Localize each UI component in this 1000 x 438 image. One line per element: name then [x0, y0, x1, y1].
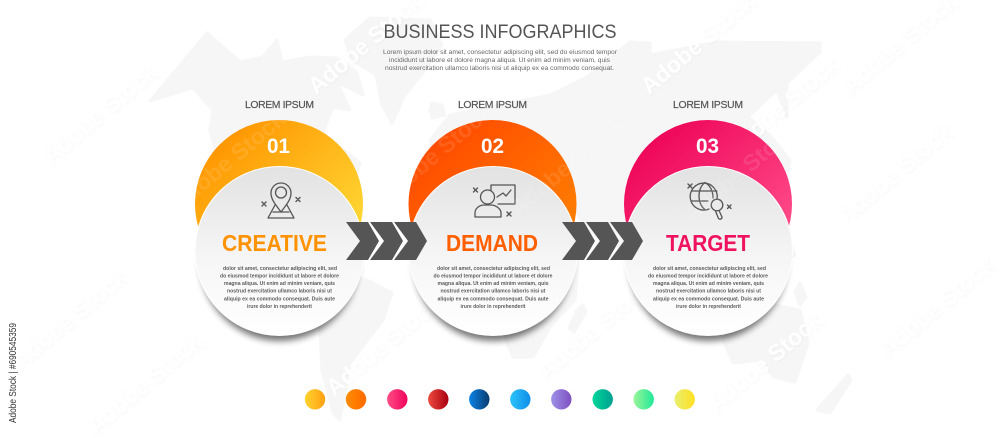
watermark pattern: Adobe Stock	[321, 291, 445, 401]
watermark pattern: Adobe Stock	[720, 52, 844, 162]
panel: creative	[195, 100, 364, 341]
body text 2: nostrud exercitation ullamco laboris nisi ut	[440, 289, 546, 295]
body text 2: irure dolor in reprehenderit	[460, 304, 526, 310]
body text 1: nostrud exercitation ullamco laboris nisi ut	[227, 289, 332, 295]
icon: map pin	[262, 183, 300, 218]
number 03: 03	[696, 135, 719, 158]
watermarks over circles: Adobe Stock	[678, 117, 802, 227]
heading: lorem ipsum 1: LOREM IPSUM	[245, 100, 314, 111]
body text 3: dolor sit amet, consectetur adipiscing elit, sed	[653, 266, 767, 272]
body text 2: dolor sit amet, consectetur adipiscing elit, sed	[437, 266, 551, 272]
intro text	[383, 49, 618, 72]
body text 1	[220, 266, 339, 310]
body text 3: irure dolor in reprehenderit	[676, 304, 741, 310]
body text 1: dolor sit amet, consectetur adipiscing elit, sed	[223, 266, 338, 272]
body text 2	[434, 266, 552, 310]
watermarks over circles	[166, 99, 802, 227]
circle shadow 3	[629, 183, 787, 341]
body text 3: aliquip ex ea commodo consequat. Duis aute	[653, 296, 764, 302]
watermarks over circles: Adobe Stock	[166, 106, 290, 216]
body text 3: magna aliqua. Ut enim ad minim veniam, quis	[653, 281, 764, 287]
heading: lorem ipsum 3: LOREM IPSUM	[673, 100, 743, 111]
body text 2: do eiusmod tempor incididunt ut labore et dolore	[434, 274, 552, 280]
title: BUSINESS INFOGRAPHICS	[384, 22, 616, 43]
intro text: Lorem ipsum dolor sit amet, consectetur adipiscing elit, sed do eiusmod tempor	[383, 49, 618, 56]
side credit: Adobe Stock | #690545359	[8, 323, 19, 423]
white circle 3	[624, 166, 792, 336]
world map background	[150, 18, 851, 420]
arrow: chevrons 1 to 2	[346, 222, 427, 260]
arrow: chevrons 2 to 3	[562, 222, 643, 260]
colored circle 1	[195, 120, 363, 288]
body text 1: magna aliqua. Ut enim ad minim veniam, quis	[224, 281, 335, 287]
body text 2: magna aliqua. Ut enim ad minim veniam, quis	[438, 281, 548, 287]
number 02: 02	[481, 135, 504, 158]
panel: demand	[408, 100, 578, 341]
intro text: incididunt ut labore et dolore magna aliqua. Ut enim ad minim veniam, quis	[389, 57, 611, 64]
circle shadow 2	[414, 183, 572, 341]
white circle 1	[195, 166, 364, 336]
body text 3: nostrud exercitation ullamco laboris nisi ut	[656, 289, 761, 295]
circle shadow 1	[200, 183, 358, 341]
label: target: TARGET	[666, 230, 750, 256]
watermark pattern: Adobe Stock	[703, 307, 827, 417]
label: demand: DEMAND	[446, 230, 538, 256]
watermark pattern: Adobe Stock	[533, 274, 657, 384]
panel: target	[624, 100, 792, 341]
body text 1: aliquip ex ea commodo consequat. Duis aute	[224, 296, 335, 302]
intro text: nostrud exercitation ullamco laboris nisi ut aliquip ex ea commodo consequat.	[385, 65, 614, 72]
body text 1: irure dolor in reprehenderit	[247, 304, 312, 310]
watermark pattern: Adobe Stock	[875, 252, 999, 362]
watermarks over circles: Adobe Stock	[373, 99, 497, 209]
label: creative: CREATIVE	[222, 230, 327, 256]
body text 2: aliquip ex ea commodo consequat. Duis aute	[438, 296, 548, 302]
body text 1: do eiusmod tempor incididunt ut labore et dolore	[220, 274, 339, 280]
white circle 2	[408, 166, 578, 336]
watermark pattern: Adobe Stock	[83, 329, 207, 438]
icon: globe with magnifier	[688, 182, 731, 219]
body text 3	[648, 266, 768, 310]
colour swatches	[305, 389, 695, 409]
watermark pattern: Adobe Stock	[8, 264, 132, 374]
colored circle 3	[624, 120, 792, 288]
watermarks over circles: Adobe Stock	[505, 111, 629, 221]
icon: presenter with chart	[474, 185, 515, 217]
body text 3: do eiusmod tempor incididunt ut labore et dolore	[648, 274, 768, 280]
number 01: 01	[267, 135, 290, 158]
watermark pattern: Adobe Stock	[38, 59, 162, 169]
heading: lorem ipsum 2: LOREM IPSUM	[458, 100, 527, 111]
watermark pattern: Adobe Stock	[833, 119, 957, 229]
colored circle 2	[408, 120, 576, 288]
